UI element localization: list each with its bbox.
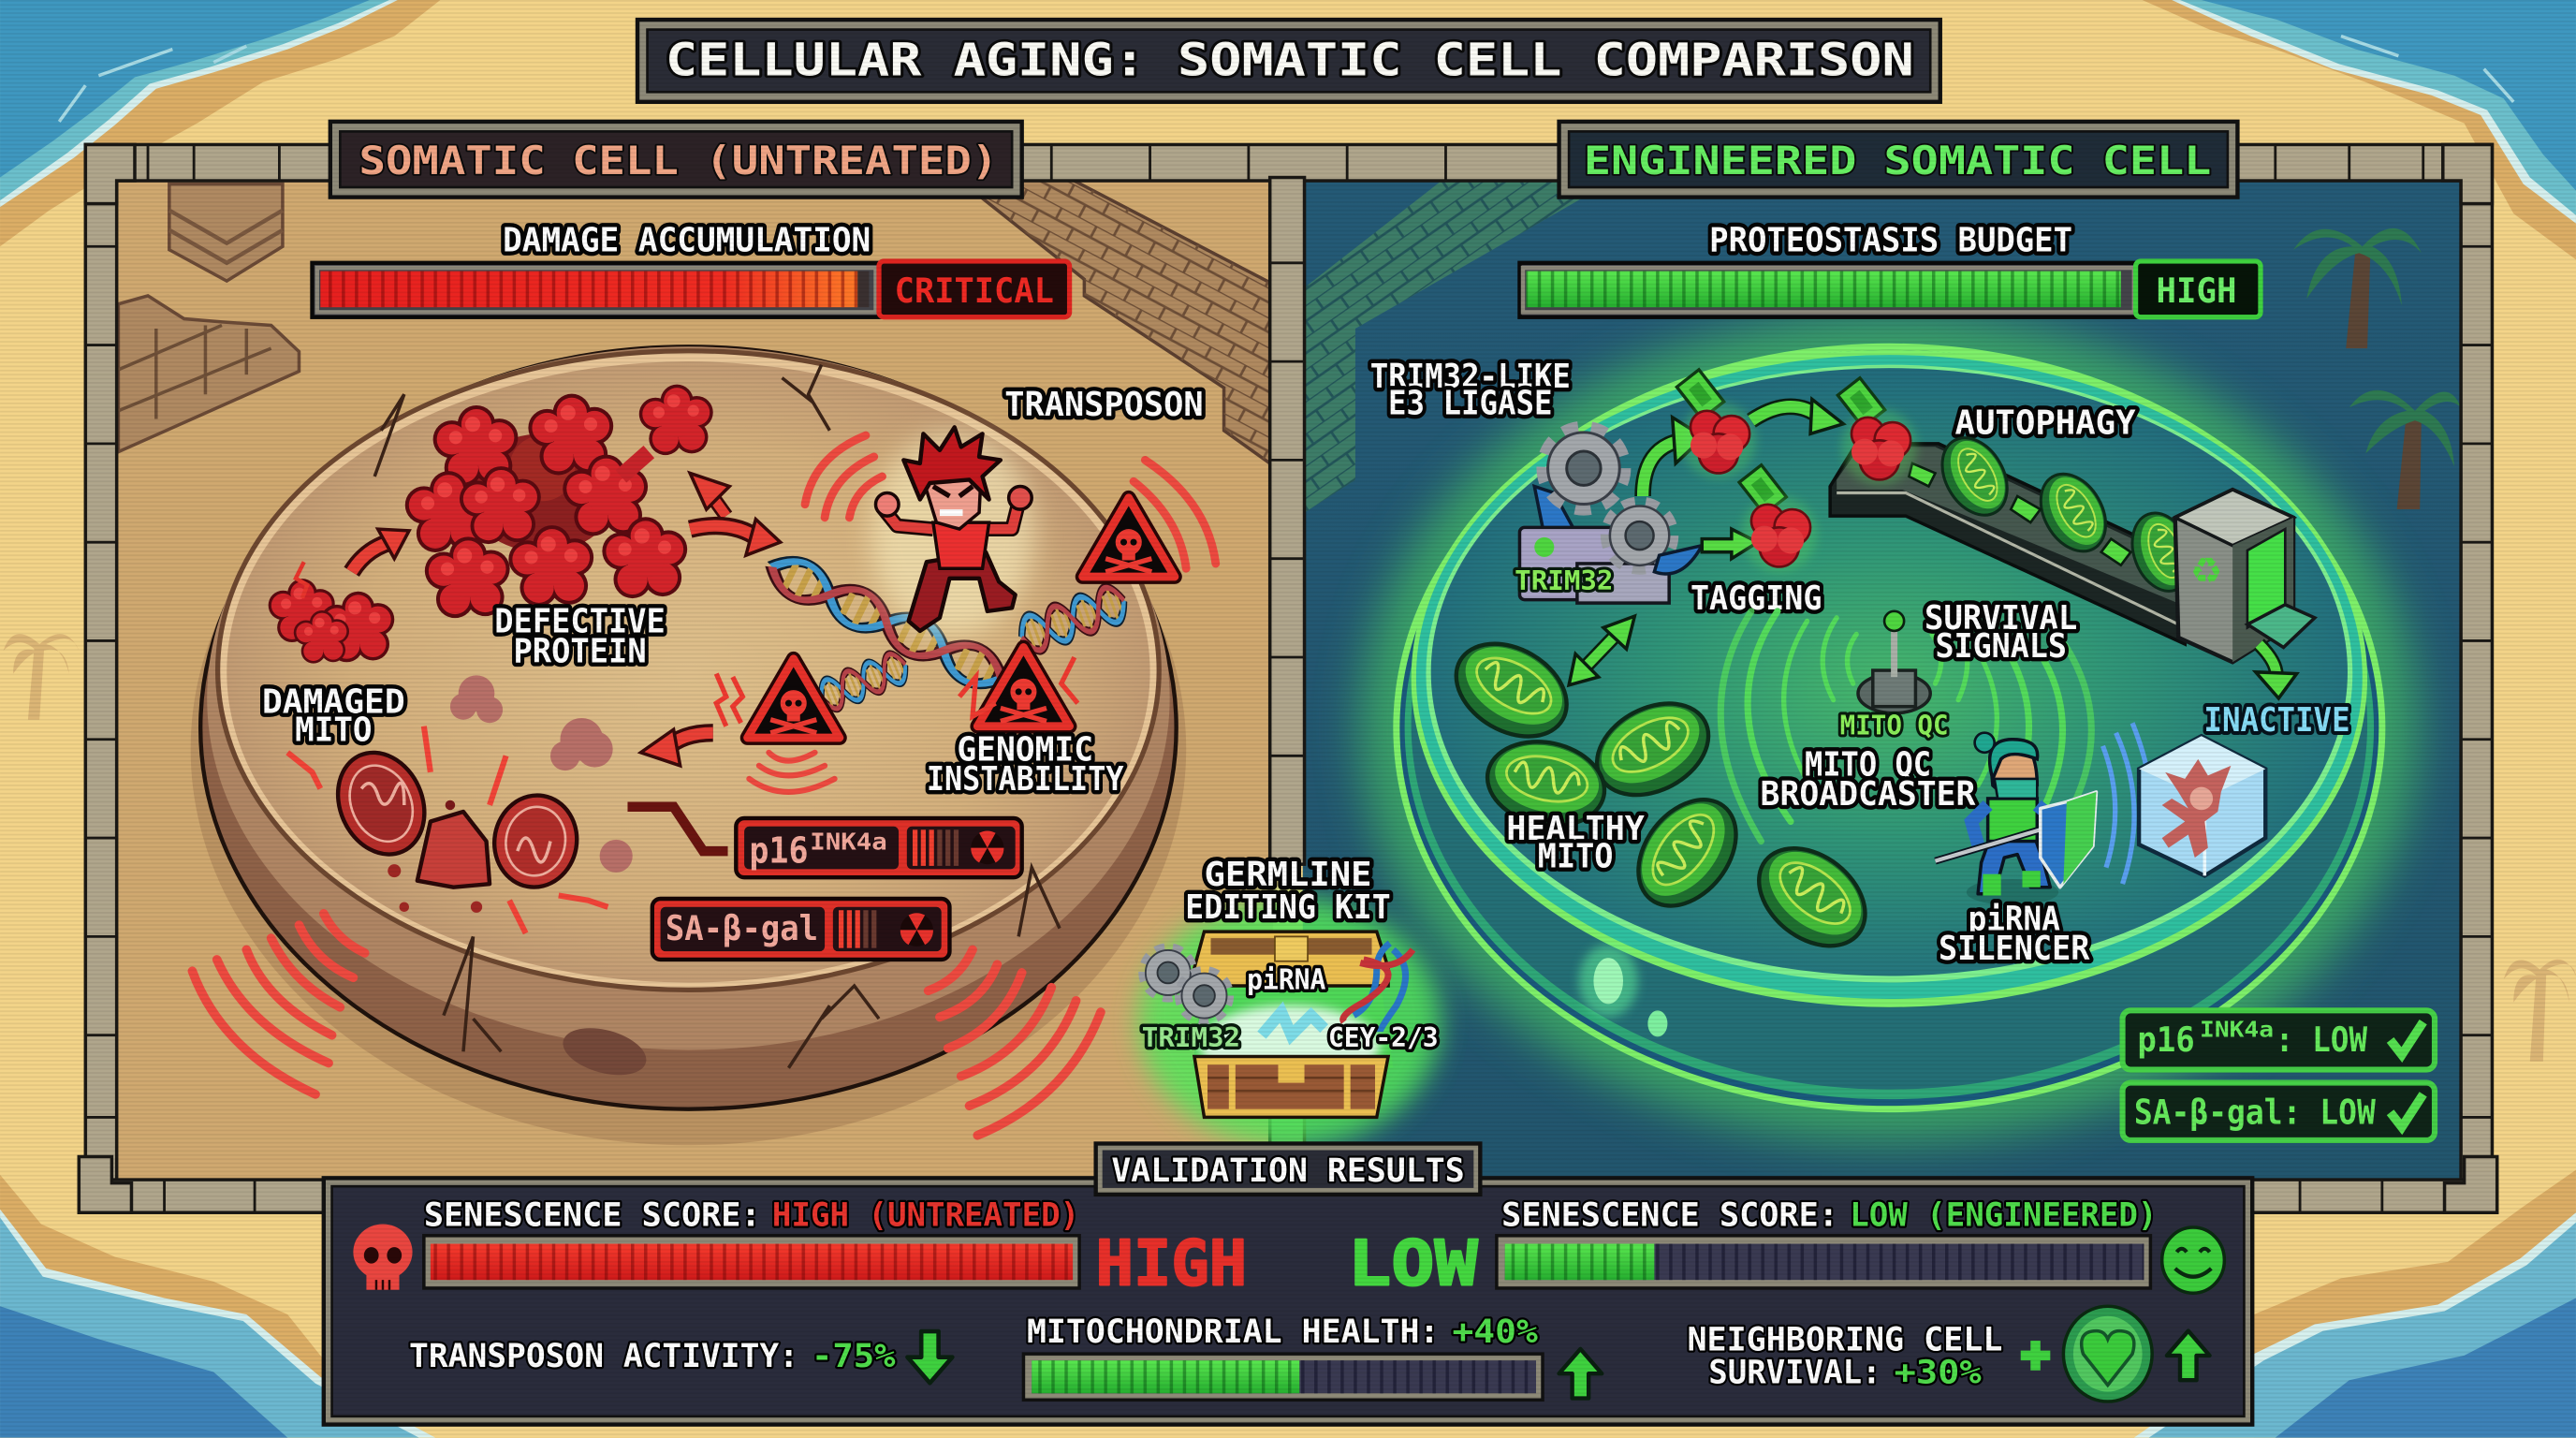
icons: healthy mitochondria — [1440, 625, 1884, 966]
background: ocean corner top-right — [2143, 0, 2576, 259]
badge: SA-beta-gal high: SA-β-gal — [666, 908, 818, 948]
signals: bottom right arcs — [929, 949, 1101, 1136]
value: high: HIGH — [1096, 1226, 1247, 1299]
label: healthy mito — [1506, 810, 1645, 876]
icon: plus — [2021, 1341, 2050, 1371]
label: healthy mito: MITO — [1538, 838, 1613, 876]
machine: trim32 ligase — [1515, 429, 1702, 603]
label: kit pirna: piRNA — [1247, 964, 1325, 997]
chest body — [1194, 1056, 1388, 1117]
badge: p16 high: INK4a — [810, 828, 887, 855]
arrow: dna back to mito — [641, 729, 713, 766]
title banner: CELLULAR AGING: SOMATIC CELL COMPARISON — [666, 35, 1914, 87]
badge: p16 low: : LOW — [2276, 1020, 2368, 1060]
label: trim32-like e3 ligase — [1370, 358, 1571, 422]
arrow: recycler output — [2256, 644, 2297, 698]
metric: mitochondrial health: +40% — [1453, 1313, 1538, 1351]
tab: validation results — [1096, 1143, 1480, 1195]
metric: mitochondrial health: MITOCHONDRIAL HEALTH: — [1027, 1313, 1439, 1351]
icon: faint beach palm left — [4, 634, 79, 720]
badge: critical: CRITICAL — [895, 271, 1054, 311]
label: damaged mito — [262, 683, 405, 750]
badge: p16 high: p16 — [749, 829, 809, 872]
chest lid — [1194, 932, 1388, 986]
icon: red skull — [353, 1224, 413, 1290]
icon: damaged mitochondrion — [269, 562, 394, 664]
background: ocean corner top-left — [0, 0, 440, 246]
icon: pale debris clouds — [450, 675, 633, 873]
glow — [1138, 897, 1441, 1147]
signals: mito qc waves — [1720, 611, 2091, 842]
ruin: brick wall top right — [956, 178, 1270, 463]
protein tagged: on belt — [1837, 378, 1917, 485]
badge: high: HIGH — [2157, 271, 2237, 311]
badge: p16 high — [736, 818, 1022, 877]
signals: below triangle arcs — [749, 753, 835, 792]
frame: stone wall — [79, 144, 2497, 1212]
metric: transposon activity: -75% — [812, 1337, 896, 1375]
icon: palm tree upper — [2293, 228, 2422, 348]
cell: healthy glowing dish — [1360, 314, 2418, 1142]
icon: green smiley — [2162, 1227, 2224, 1293]
label: defective protein: DEFECTIVE — [494, 603, 666, 641]
label: kit trim32: TRIM32 — [1142, 1022, 1240, 1053]
title banner — [637, 20, 1940, 102]
label: pirna silencer — [1939, 900, 2090, 968]
panel background blue — [1303, 178, 2463, 1183]
background: ocean corner bottom-left — [0, 1175, 435, 1438]
icon: warning triangle right — [1083, 498, 1175, 577]
ruin: stone blocks — [118, 296, 299, 452]
label: survival signals — [1925, 599, 2077, 666]
label: damaged mito: DAMAGED — [262, 683, 405, 722]
signals: transposon arcs — [805, 435, 1216, 568]
ruin: stone column — [169, 184, 283, 281]
label: senescence high: SENESCENCE SCORE: — [424, 1196, 761, 1234]
label: trim32-like e3 ligase: E3 LIGASE — [1388, 384, 1553, 422]
mito on belt 3 — [2122, 505, 2202, 599]
label: senescence high — [424, 1196, 1079, 1234]
panel: untreated somatic cell — [117, 178, 1273, 1183]
germline editing kit — [1138, 856, 1441, 1147]
badge: p16 low: INK4a — [2200, 1018, 2274, 1042]
metric: transposon activity: TRANSPOSON ACTIVITY: — [409, 1337, 798, 1375]
mito on belt 1 — [1929, 426, 2020, 527]
label: survival signals: SURVIVAL — [1925, 599, 2077, 638]
label: kit cey-2/3: CEY-2/3 — [1328, 1022, 1439, 1053]
arrow: machine to top protein — [1643, 418, 1704, 496]
badge: high — [2136, 261, 2261, 317]
conveyor: autophagy belt — [1830, 426, 2202, 644]
label: pirna silencer: SILENCER — [1939, 930, 2090, 968]
metric: neighboring cell survival: +30% — [1895, 1354, 1982, 1392]
badge: SA-beta-gal high — [652, 899, 949, 960]
label: mito qc broadcaster: MITO QC — [1805, 745, 1931, 784]
signals: silencing shield waves — [2102, 723, 2150, 884]
character: transposon — [871, 427, 1035, 636]
label: germline editing kit: EDITING KIT — [1185, 888, 1391, 927]
icon: red lightning sparks — [716, 657, 1077, 726]
value: low: LOW — [1348, 1226, 1479, 1299]
bar: senescence low — [1497, 1236, 2150, 1288]
label: transposon: TRANSPOSON — [1004, 386, 1204, 424]
label: defective protein — [494, 603, 666, 670]
arrow: top protein to belt — [1751, 399, 1843, 433]
arrow: double headed — [1569, 616, 1634, 685]
label: trim32-like e3 ligase: TRIM32-LIKE — [1370, 358, 1571, 396]
mito on belt 2 — [2027, 462, 2119, 563]
connector: mito to p16 — [627, 807, 728, 851]
label: germline editing kit: GERMLINE — [1204, 856, 1372, 894]
icon: rna fragment — [1262, 1012, 1325, 1035]
panel: validation results — [324, 1143, 2252, 1425]
metric: neighboring cell survival: NEIGHBORING CELL — [1687, 1321, 2002, 1359]
bar: senescence high — [424, 1236, 1079, 1288]
label: genomic instability: INSTABILITY — [927, 760, 1124, 799]
label: survival signals: SIGNALS — [1935, 627, 2067, 666]
arrow: up mito — [1559, 1349, 1602, 1399]
label: senescence low — [1501, 1196, 2157, 1234]
header: untreated: SOMATIC CELL (UNTREATED) — [359, 138, 998, 183]
header: untreated — [330, 122, 1022, 198]
label: inactive: INACTIVE — [2203, 701, 2350, 740]
cluster: defective proteins — [405, 385, 713, 618]
metric: neighboring cell survival — [1687, 1306, 2210, 1401]
signals: bottom left arcs — [192, 914, 365, 1094]
icon: warning triangle middle — [748, 659, 840, 738]
arrow: mito to protein — [352, 529, 409, 572]
label: defective protein: PROTEIN — [514, 632, 647, 670]
tab: validation results: VALIDATION RESULTS — [1111, 1152, 1465, 1190]
protein tagged: top left — [1676, 370, 1756, 478]
arrow: down — [907, 1331, 952, 1383]
label: trim32 green: TRIM32 — [1515, 565, 1613, 596]
panel: engineered somatic cell — [1303, 178, 2463, 1183]
label: damaged mito: MITO — [295, 712, 373, 750]
label: mito qc green: MITO QC — [1840, 710, 1949, 741]
badge: p16 low: p16 — [2137, 1020, 2195, 1060]
icon: palm tree lower — [2349, 390, 2461, 509]
icon: glowing bubbles — [1579, 945, 1667, 1036]
recycler building: ♻ — [2190, 550, 2222, 593]
ruin: mossy brick wall — [1305, 178, 1618, 513]
bar: damage accumulation — [313, 222, 1070, 317]
arrow: protein up left — [690, 473, 729, 516]
icon: mito qc antenna — [1858, 611, 1930, 713]
badge: p16 low — [2123, 1010, 2435, 1070]
panel background tan — [117, 178, 1273, 1183]
metric: mitochondrial health — [1023, 1313, 1602, 1400]
badge: SA-beta-gal low: SA-β-gal: LOW — [2134, 1092, 2377, 1132]
icon: heart badge — [2063, 1306, 2152, 1401]
label: autophagy: AUTOPHAGY — [1955, 404, 2136, 442]
label: pirna silencer: piRNA — [1969, 900, 2060, 938]
header: engineered: ENGINEERED SOMATIC CELL — [1584, 138, 2211, 183]
chest interior — [1193, 979, 1393, 1068]
label: mito qc broadcaster: BROADCASTER — [1761, 775, 1976, 814]
label: senescence low: LOW (ENGINEERED) — [1850, 1196, 2157, 1234]
character: pirna silencer — [1935, 733, 2096, 905]
metric: transposon activity — [409, 1331, 952, 1383]
badge: critical — [879, 261, 1070, 317]
label: proteostasis budget: PROTEOSTASIS BUDGET — [1709, 222, 2072, 260]
arrow: protein to dna — [690, 520, 781, 555]
label: tagging: TAGGING — [1690, 580, 1822, 618]
label: genomic instability — [927, 731, 1124, 799]
arrow: machine to lower protein — [1702, 529, 1758, 559]
icon: dna strands — [764, 550, 1130, 712]
label: senescence low: SENESCENCE SCORE: — [1501, 1196, 1838, 1234]
protein tagged: lower — [1739, 465, 1817, 572]
metric: neighboring cell survival: SURVIVAL: — [1708, 1354, 1881, 1392]
icon: ice cube with frozen transposon — [2139, 736, 2265, 875]
icon: faint beach palm right — [2504, 960, 2576, 1062]
icon: kit dna — [1343, 943, 1412, 1032]
recycler building — [2175, 490, 2315, 662]
label: germline editing kit — [1185, 856, 1391, 927]
icon: warning triangle genomic — [977, 647, 1070, 726]
label: healthy mito: HEALTHY — [1506, 810, 1645, 848]
badge: SA-beta-gal low — [2123, 1083, 2435, 1140]
header: engineered — [1559, 122, 2237, 198]
arrow: up survival — [2167, 1331, 2210, 1380]
label: damage accumulation: DAMAGE ACCUMULATION — [503, 222, 871, 260]
label: senescence high: HIGH (UNTREATED) — [772, 1196, 1079, 1234]
background: ocean corner bottom-right — [2134, 1170, 2576, 1438]
label: mito qc broadcaster — [1761, 745, 1976, 814]
bar: proteostasis budget — [1519, 222, 2261, 317]
icon: kit gears — [1143, 947, 1229, 1020]
label: genomic instability: GENOMIC — [957, 731, 1093, 770]
cell: cracked petri dish — [191, 346, 1186, 1145]
icon: broken mitochondrion — [287, 726, 607, 933]
